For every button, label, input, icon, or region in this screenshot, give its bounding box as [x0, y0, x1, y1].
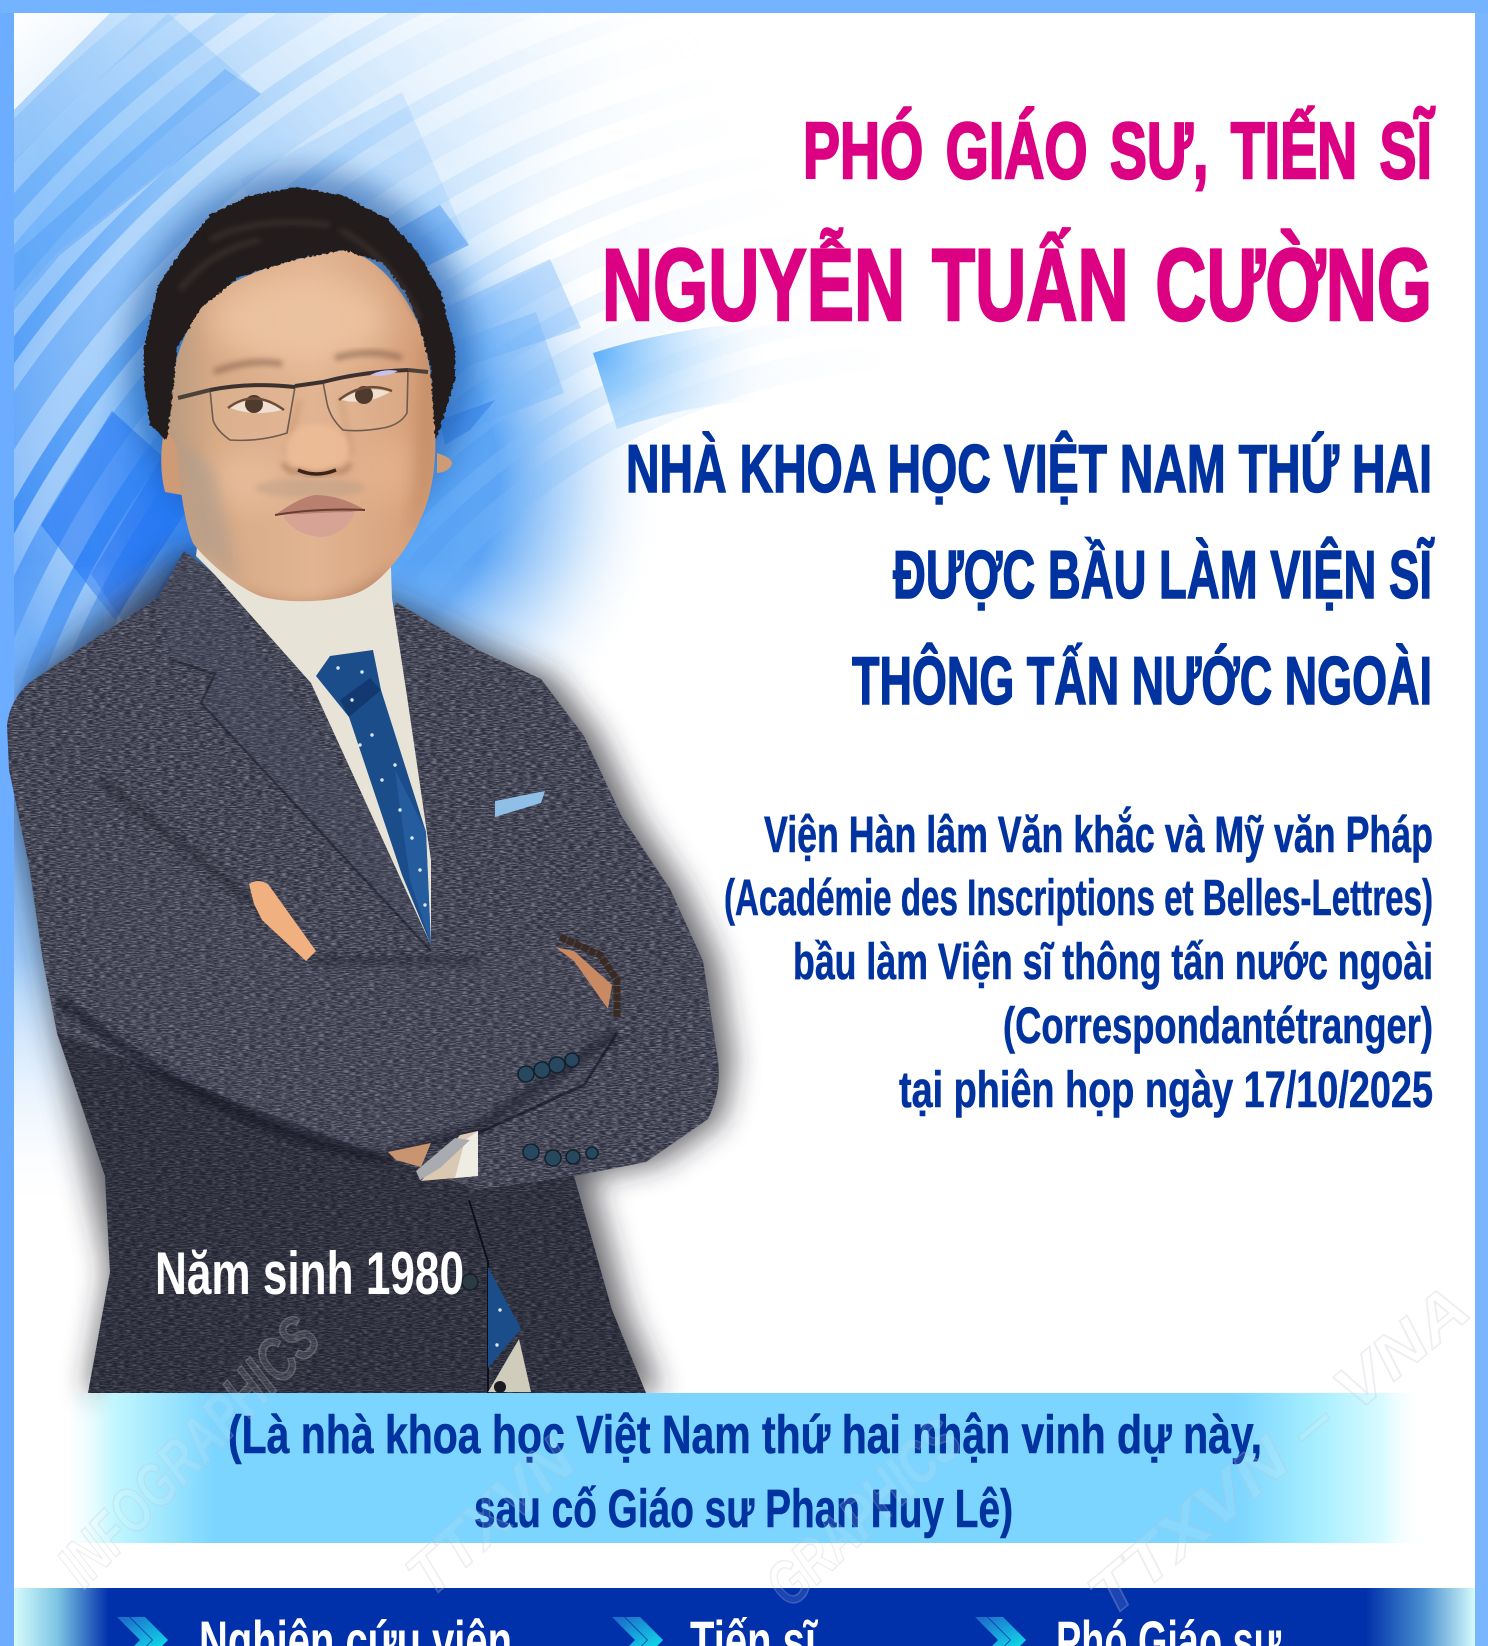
- body shadow: [10, 551, 732, 1393]
- sleeve buttons: [462, 1053, 598, 1290]
- chevron 1: [117, 1617, 168, 1646]
- left hand fingers: [249, 881, 316, 961]
- portrait: [0, 170, 732, 1400]
- bottom career bar: [14, 1588, 1475, 1646]
- suit jacket: [0, 540, 730, 1400]
- shirt: [196, 520, 431, 945]
- chevron 2: [612, 1617, 663, 1646]
- head shadow: [128, 170, 472, 550]
- face: [167, 250, 440, 620]
- watermarks: INFOGRAPHICS: [44, 1304, 334, 1600]
- chevron 3: [975, 1617, 1026, 1646]
- nose: [283, 424, 350, 474]
- glasses: [178, 370, 428, 440]
- description text: [724, 805, 1433, 1118]
- watermarks: [44, 1273, 1483, 1631]
- lower tie and shirt: [488, 1267, 531, 1393]
- callout band: sau cố Giáo sư Phan Huy Lê): [474, 1479, 1013, 1539]
- eyes: [228, 386, 392, 413]
- mouth: [275, 495, 365, 537]
- ears: [161, 430, 452, 495]
- watermarks: GRAPHICS: [752, 1406, 975, 1620]
- wrist and watch: [388, 1131, 478, 1181]
- callout band: [66, 1393, 1424, 1543]
- heading lines: [626, 430, 1435, 719]
- eyebrows: [214, 353, 402, 372]
- background: blue arcs: [0, 0, 930, 1220]
- left lapel: [158, 551, 431, 951]
- birth year: Năm sinh 1980: [155, 1240, 464, 1307]
- hair: [144, 187, 455, 440]
- tie: [316, 650, 431, 945]
- pocket square: [495, 791, 545, 817]
- right hand and bracelet: [555, 937, 617, 1018]
- watermarks: TTXVN: [393, 1424, 589, 1610]
- watermarks: TTXVN – VNA: [1075, 1273, 1483, 1631]
